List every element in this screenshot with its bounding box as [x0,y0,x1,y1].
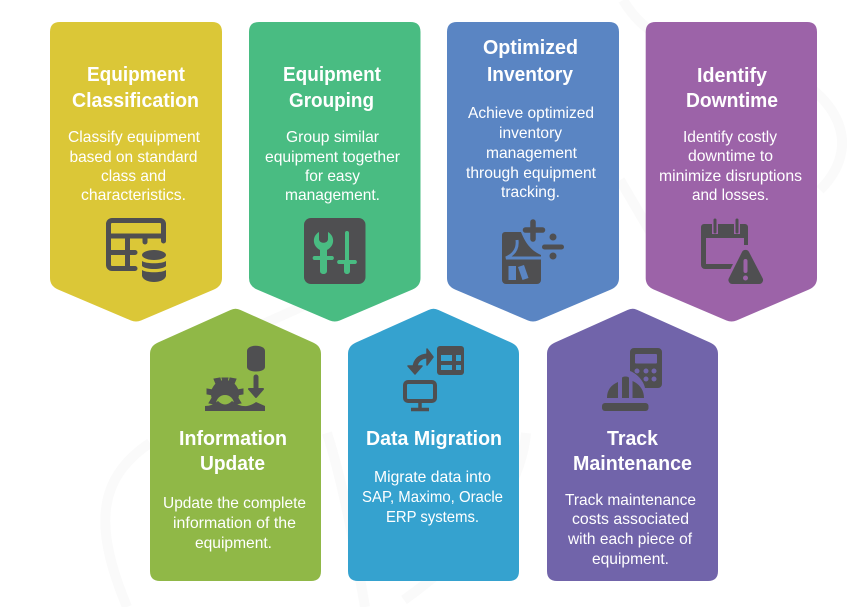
description: with each piece of [567,531,693,548]
heading: Equipment [283,64,381,86]
heading: Data Migration [366,428,502,450]
card shape [547,309,718,581]
description [265,129,401,204]
description: equipment. [592,551,669,568]
icon: calculator and hard hat [602,348,662,411]
heading: Information [179,428,287,450]
heading: Inventory [487,64,574,86]
heading [283,64,381,112]
description: through equipment [466,165,597,182]
heading: Track [607,428,659,450]
description: tracking. [501,184,560,201]
description [659,129,802,204]
heading: Classification [72,90,199,112]
card shape [50,22,222,322]
description: Track maintenance [565,492,696,509]
panel: Equipment Grouping [249,22,420,322]
description: based on standard [70,149,198,166]
icon: wrench and screwdriver tile [304,218,366,284]
description [362,469,503,526]
heading: Maintenance [573,453,692,475]
description: Group similar [286,129,380,146]
heading: Grouping [289,90,374,112]
card shape [646,22,817,322]
description: equipment together [265,149,401,166]
description: Migrate data into [374,469,491,486]
description [68,129,201,204]
description: costs associated [572,511,689,528]
description: inventory [499,125,562,142]
icon: calendar with warning [701,220,763,284]
description: class and [101,168,166,185]
card shape [348,309,519,581]
heading: Identify [697,65,768,87]
description [163,495,306,552]
icon: database update over gear [205,346,265,413]
panel: Optimized Inventory [447,22,619,322]
panel: Equipment Classification [50,22,222,322]
panel: Information Update [150,309,321,581]
heading [72,64,199,112]
heading [573,428,692,475]
icon: table and database [108,220,166,282]
heading: Downtime [686,90,778,112]
icon: table to monitor migration [405,346,464,410]
description: and losses. [692,187,769,204]
description: Update the complete [163,495,306,512]
description: for easy [305,168,360,185]
card shape [447,22,619,322]
card shape [150,309,321,581]
heading: Update [200,453,265,475]
heading: Optimized [483,37,578,59]
card shape [249,22,420,322]
heading: Equipment [87,64,185,86]
description: characteristics. [81,187,186,204]
description: information of the [173,515,296,532]
description: ERP systems. [386,509,479,526]
description [466,105,597,201]
description [565,492,696,568]
description: downtime to [688,148,773,165]
panel: Track Maintenance [547,309,718,581]
description: management [486,145,578,162]
heading [686,65,778,112]
panel: Data Migration [348,309,519,581]
icon: inventory with math symbols [502,222,562,284]
description: Identify costly [683,129,777,146]
description: equipment. [195,535,272,552]
description: Achieve optimized [468,105,594,122]
description: management. [285,187,380,204]
panel: Identify Downtime [646,22,817,322]
heading [179,428,287,475]
description: Classify equipment [68,129,201,146]
heading [483,37,578,86]
description: minimize disruptions [659,168,802,185]
description: SAP, Maximo, Oracle [362,489,503,506]
